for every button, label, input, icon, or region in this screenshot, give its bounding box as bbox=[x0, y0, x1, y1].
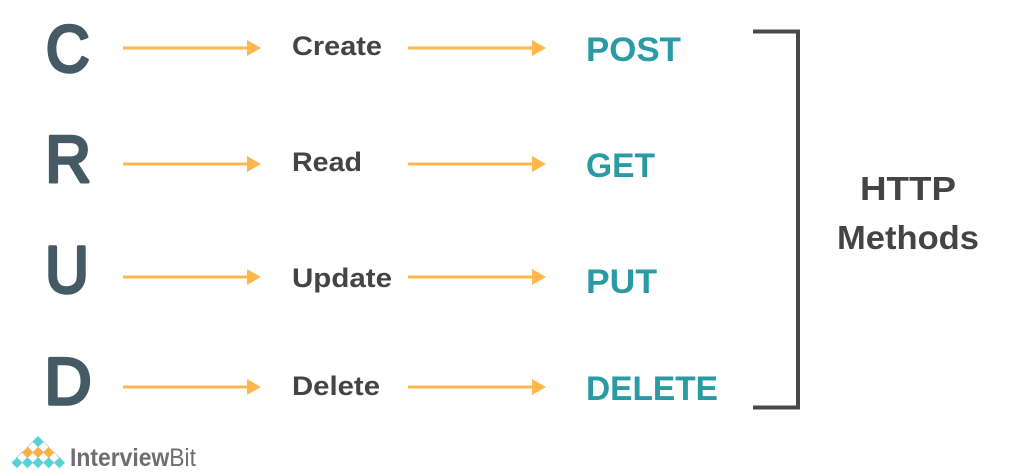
arrow: Read to GET bbox=[408, 156, 546, 172]
arrow: Create to POST bbox=[408, 40, 546, 56]
label: Read: Read bbox=[292, 147, 362, 177]
label: Delete: Delete bbox=[292, 371, 380, 401]
icon: diamond pyramid bbox=[12, 436, 65, 468]
arrow: Delete to DELETE bbox=[408, 379, 546, 395]
label: Update: Update bbox=[292, 263, 392, 293]
letter R: R bbox=[45, 122, 91, 196]
method: POST: POST bbox=[586, 31, 681, 69]
arrow: C to Create bbox=[123, 40, 261, 56]
wordmark: InterviewBit bbox=[70, 444, 196, 472]
arrow: D to Delete bbox=[123, 379, 261, 395]
method: DELETE: DELETE bbox=[586, 370, 718, 408]
heading: HTTP Methods: Methods bbox=[837, 219, 979, 256]
bracket bbox=[753, 32, 798, 408]
letter D: D bbox=[44, 344, 92, 418]
letter U: U bbox=[45, 232, 89, 306]
letter C: C bbox=[46, 11, 90, 85]
arrow: R to Read bbox=[123, 156, 261, 172]
logo: InterviewBit bbox=[12, 436, 196, 472]
heading: HTTP Methods: HTTP bbox=[860, 170, 956, 207]
heading: HTTP Methods bbox=[837, 170, 979, 256]
arrow: U to Update bbox=[123, 269, 261, 285]
method: GET: GET bbox=[586, 147, 655, 185]
label: Create: Create bbox=[292, 31, 382, 61]
arrow: Update to PUT bbox=[408, 269, 546, 285]
method: PUT: PUT bbox=[586, 263, 657, 301]
